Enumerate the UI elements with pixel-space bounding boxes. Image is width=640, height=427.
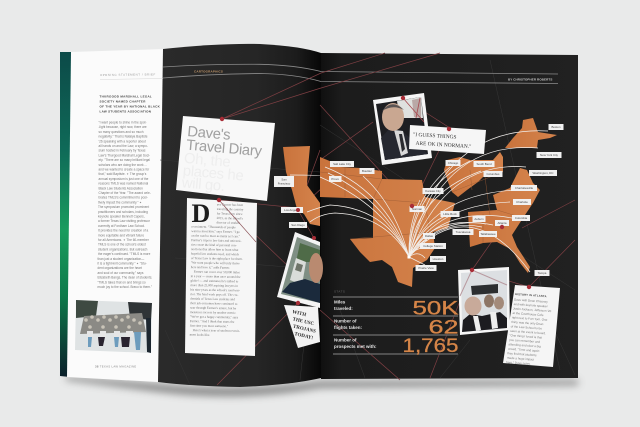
left page body text: sium hosted in February by Texas <box>98 149 146 153</box>
left page body text: Black Law Students Association <box>98 186 143 190</box>
left page body text: ety. "There are so many brilliant legal <box>98 158 150 162</box>
left page body text: so many questions and so much <box>98 130 144 134</box>
note body: attending and slow a big <box>508 342 541 348</box>
note body: and with keynote speaker <box>514 302 548 308</box>
article text: ave Farmer has been <box>217 203 244 207</box>
note body: of the Law School to be <box>511 324 542 331</box>
left white page <box>67 49 164 382</box>
article text <box>190 202 244 337</box>
city labels: Francisco <box>278 182 291 186</box>
note heading: HISTORY IN ATLANTA <box>515 292 547 298</box>
article text: soar through Farmer's tenure, but he <box>190 306 237 311</box>
stats block <box>333 290 459 357</box>
city labels: Chicago <box>448 161 459 165</box>
note body: "One thing I loved is that <box>509 333 542 340</box>
city labels: Tampa <box>538 271 547 275</box>
stat values: 62 <box>428 318 458 338</box>
left page heading: SOCIETY NAMED CHAPTER <box>100 100 146 104</box>
map: western and central states <box>320 157 455 287</box>
stat labels: flights taken: <box>334 325 363 330</box>
title: subtitle <box>180 151 245 196</box>
US map <box>283 118 557 287</box>
left page body text: brates TMLS's commitment to posi- <box>98 196 148 200</box>
quote card <box>409 125 486 154</box>
left page body text: reasons TMLS was named National <box>98 182 148 186</box>
city labels: Houston <box>433 257 444 261</box>
left page body text: for all Americans. ✦ The 60-member <box>98 238 149 242</box>
note body: seen at the event to board. <box>510 329 546 335</box>
article text: Farmer can cover over 50,000 miles <box>194 270 241 275</box>
note body: right next to Fort Tom. One <box>512 315 548 322</box>
article text: globe! — and estimates he's talked to <box>191 279 239 283</box>
left page body text: "TMLS takes that on and brings so <box>98 280 146 284</box>
city labels: Salt Lake City <box>333 162 351 166</box>
map: southeast <box>468 168 540 273</box>
red string over card <box>219 200 256 242</box>
note body: crowd. "Time and again <box>508 347 540 353</box>
page number and folio: 38 TEXAS LAW MAGAZINE <box>95 364 136 368</box>
USC caption card: THE USC <box>292 317 315 327</box>
left page body text: "I want people to shine in the spot- <box>98 120 147 124</box>
article text: 2015, as the school's <box>217 216 244 221</box>
note body: Dave with Dean Chesney <box>514 298 548 304</box>
left edge green strip <box>60 52 72 377</box>
city labels: Columbia <box>515 216 527 220</box>
article text: Farmer's trips to law fairs and universi- <box>191 238 241 243</box>
stat labels <box>334 300 377 349</box>
left page body text: The symposium promoted prominent <box>98 205 149 209</box>
stat labels: Number of <box>334 338 357 342</box>
article card <box>185 198 257 356</box>
city labels: Boston <box>552 125 561 129</box>
city labels: Tuscaloosa <box>456 230 471 234</box>
stat values <box>402 298 459 357</box>
city labels: Atlanta <box>498 221 507 225</box>
red string lines <box>217 53 575 385</box>
left page body text: Elizabeth Bangs, The dean of students. <box>98 276 152 280</box>
note body <box>506 297 552 367</box>
article text: here and love it," adds Farmer. <box>191 265 230 271</box>
pins <box>217 96 531 305</box>
city labels: Charlottesville <box>515 186 533 190</box>
article text: Farmer. "And I think that starts the <box>190 319 235 324</box>
left page body text: and we wanted to create a space for <box>98 168 149 172</box>
city labels: Washington, DC <box>533 171 553 175</box>
left page body text: that," said Baptiste. ✦ The group's <box>98 172 147 176</box>
left page body text: Law's Thurgood Marshall Legal Soci- <box>98 153 150 157</box>
article text: director of student <box>217 221 240 225</box>
left page body text: keynote speaker Bennett Capers, <box>98 214 145 218</box>
left page body text: '26 speaking with a reporter about <box>98 139 146 143</box>
USC photo <box>277 232 323 308</box>
left page body text: than just a student organization— <box>98 257 145 261</box>
city labels: Norman <box>412 207 423 211</box>
left page heading: LAW STUDENTS ASSOCIATION <box>100 110 151 114</box>
article text: for Texas Law since <box>217 212 243 216</box>
city labels <box>274 124 564 276</box>
article text: more than 25,000 aspiring lawyers in <box>190 283 238 289</box>
left page body text: scholars who are doing the work ... <box>98 163 147 167</box>
left page body text: much joy to the school. Bravo to them." <box>98 285 152 289</box>
title: subtitle: will go. <box>180 175 225 195</box>
left page body text: negativity." That is Natalya Baptiste <box>98 135 148 139</box>
article text: ment looks like. <box>190 333 210 337</box>
article text: ties create the kind of personal con- <box>191 243 237 247</box>
left page body text: more equitable and vibrant future <box>98 233 144 237</box>
article text: rior. The hard work pays off. The cre- <box>190 292 238 297</box>
stat values: 1,765 <box>402 336 458 357</box>
article text: on the road to meet as many as I can." <box>191 234 241 238</box>
drop cap: D <box>192 199 210 228</box>
map: California <box>283 146 320 226</box>
USC caption card: WITH <box>292 310 307 318</box>
left page body text: student organizations. But outreach <box>98 247 148 251</box>
city labels: Auburn <box>474 217 484 221</box>
city labels: Columbus <box>486 172 500 176</box>
stat labels: prospects met with: <box>334 344 377 349</box>
dark left page <box>158 44 321 387</box>
article text: nections that allow him to learn what <box>191 247 239 252</box>
left page body text: annual symposium is just one of the <box>98 177 149 181</box>
article text: his nine years as the school's road war- <box>190 288 240 292</box>
article text: measures success by another metric. <box>190 310 237 315</box>
faint grid lines <box>160 60 575 385</box>
article text: Here's what a year of student recruit- <box>193 328 240 333</box>
USC caption card: TROJANS <box>292 325 316 335</box>
note body: you can remember and <box>509 338 540 344</box>
left page body text: Chapter of the Year. "The award cele- <box>98 191 151 195</box>
group selfie photo <box>458 267 510 335</box>
note body: at the Courthouse Cafe <box>512 311 544 317</box>
quote card: ARE OK IN NORMAN." <box>415 141 471 150</box>
map: New York and New England <box>505 118 557 148</box>
note body: made a huge impact <box>507 356 534 362</box>
stat labels: Miles <box>334 300 346 304</box>
header: section label: OPENING STATEMENT / BRIEF <box>100 72 156 77</box>
header: cartographics: CARTOGRAPHICS <box>194 70 223 74</box>
title: dave's travel diary <box>185 124 264 160</box>
stat labels: traveled: <box>334 306 353 311</box>
group photo <box>75 300 152 353</box>
city labels: New York City <box>540 153 559 157</box>
city labels: Kansas City <box>425 189 441 193</box>
map: midwest <box>444 152 503 197</box>
left page body text: it is a tight-knit community." ✦ "Stu- <box>98 262 147 266</box>
left page body text: -light because, right now, there are <box>98 125 147 129</box>
note body: here," Dave notes. <box>506 360 531 366</box>
city labels: Little Rock <box>443 212 457 216</box>
article text: "We want people who will truly thrive <box>191 261 240 265</box>
left page heading: OF THE YEAR BY NATIONAL BLACK <box>100 104 161 108</box>
stat labels: Number of <box>334 318 357 324</box>
stat values: 50K <box>412 298 459 320</box>
left page body text: tively impact the community." ✦ <box>98 200 142 204</box>
note body: they find that students <box>507 351 537 357</box>
title: dave's travel diary: Travel Diary <box>185 137 263 160</box>
article text: traveling the country <box>217 207 244 211</box>
left page body text: dent organizations are the heart <box>98 266 142 270</box>
title: subtitle: Oh, the <box>183 151 231 171</box>
dark right page <box>321 53 578 379</box>
left page body text: TMLS is one of the school's oldest <box>98 243 146 247</box>
article text: recruitment. "Thousands of people <box>191 225 236 229</box>
article text: in a year — more than once around the <box>191 274 241 279</box>
city labels: College Station <box>423 244 443 248</box>
left page body text: a former Texas Law visiting professor <box>98 219 150 223</box>
left page body text: practitioners and scholars, including <box>98 210 148 214</box>
article text: hopeful law students need, and which <box>191 252 239 257</box>
left page heading <box>100 94 161 114</box>
article text: want to meet him," says Farmer. "I go <box>191 229 240 235</box>
city labels: South Bend <box>476 162 492 166</box>
quote card: "I GUESS THINGS <box>413 132 457 141</box>
city labels: Boulder <box>362 169 372 173</box>
article text: dentials of Texas Law students and <box>190 297 235 301</box>
magazine shadow <box>66 376 578 396</box>
stats heading: STATS <box>334 290 345 294</box>
article text: "We've got a happy community," says <box>190 315 239 320</box>
title card <box>176 116 275 201</box>
city labels: San <box>281 178 287 182</box>
note body: thirty was the only Dean <box>511 320 544 326</box>
header: byline: BY CHRISTOPHER ROBERTS <box>508 78 552 82</box>
title: subtitle: places he <box>182 163 244 185</box>
city labels: Tallahassee <box>480 232 496 236</box>
hub marker <box>408 256 410 258</box>
left page body text: all hands on and the Law, a sympo- <box>98 144 148 148</box>
left page body text: the eager's continued. "TMLS is more <box>98 252 151 256</box>
flight paths to hub <box>290 131 548 272</box>
left page body text <box>98 120 152 289</box>
portrait photo <box>373 93 432 165</box>
note body: Justin Jackson, Jefferson '20 <box>513 306 552 313</box>
city labels: Charlotte <box>516 200 528 204</box>
magazine spread <box>60 44 578 387</box>
title: dave's travel diary: Dave's <box>187 124 231 144</box>
left page body text: currently at Fordham Law School. <box>98 224 145 228</box>
left page body text: and soul of our community," says <box>98 271 144 275</box>
header lines <box>100 78 163 80</box>
left page body text: It provides the need for creation of a <box>98 229 149 233</box>
article text: of Texas Law is the right place for them. <box>191 256 243 261</box>
city labels: Dallas <box>425 234 434 238</box>
article text: first time you meet someone." <box>190 324 229 328</box>
city labels: Provo <box>331 177 339 181</box>
USC caption card: TODAY! <box>294 332 314 341</box>
city labels: Los Angeles <box>284 208 300 212</box>
left page heading: THURGOOD MARSHALL LEGAL <box>100 94 152 98</box>
city labels: San Diego <box>291 223 305 227</box>
USC caption card <box>284 305 320 348</box>
stats rules <box>333 297 458 354</box>
article text: their job outcomes have continued to <box>190 301 238 306</box>
history in atlanta note <box>503 285 560 367</box>
city labels: Prairie View <box>418 266 435 270</box>
